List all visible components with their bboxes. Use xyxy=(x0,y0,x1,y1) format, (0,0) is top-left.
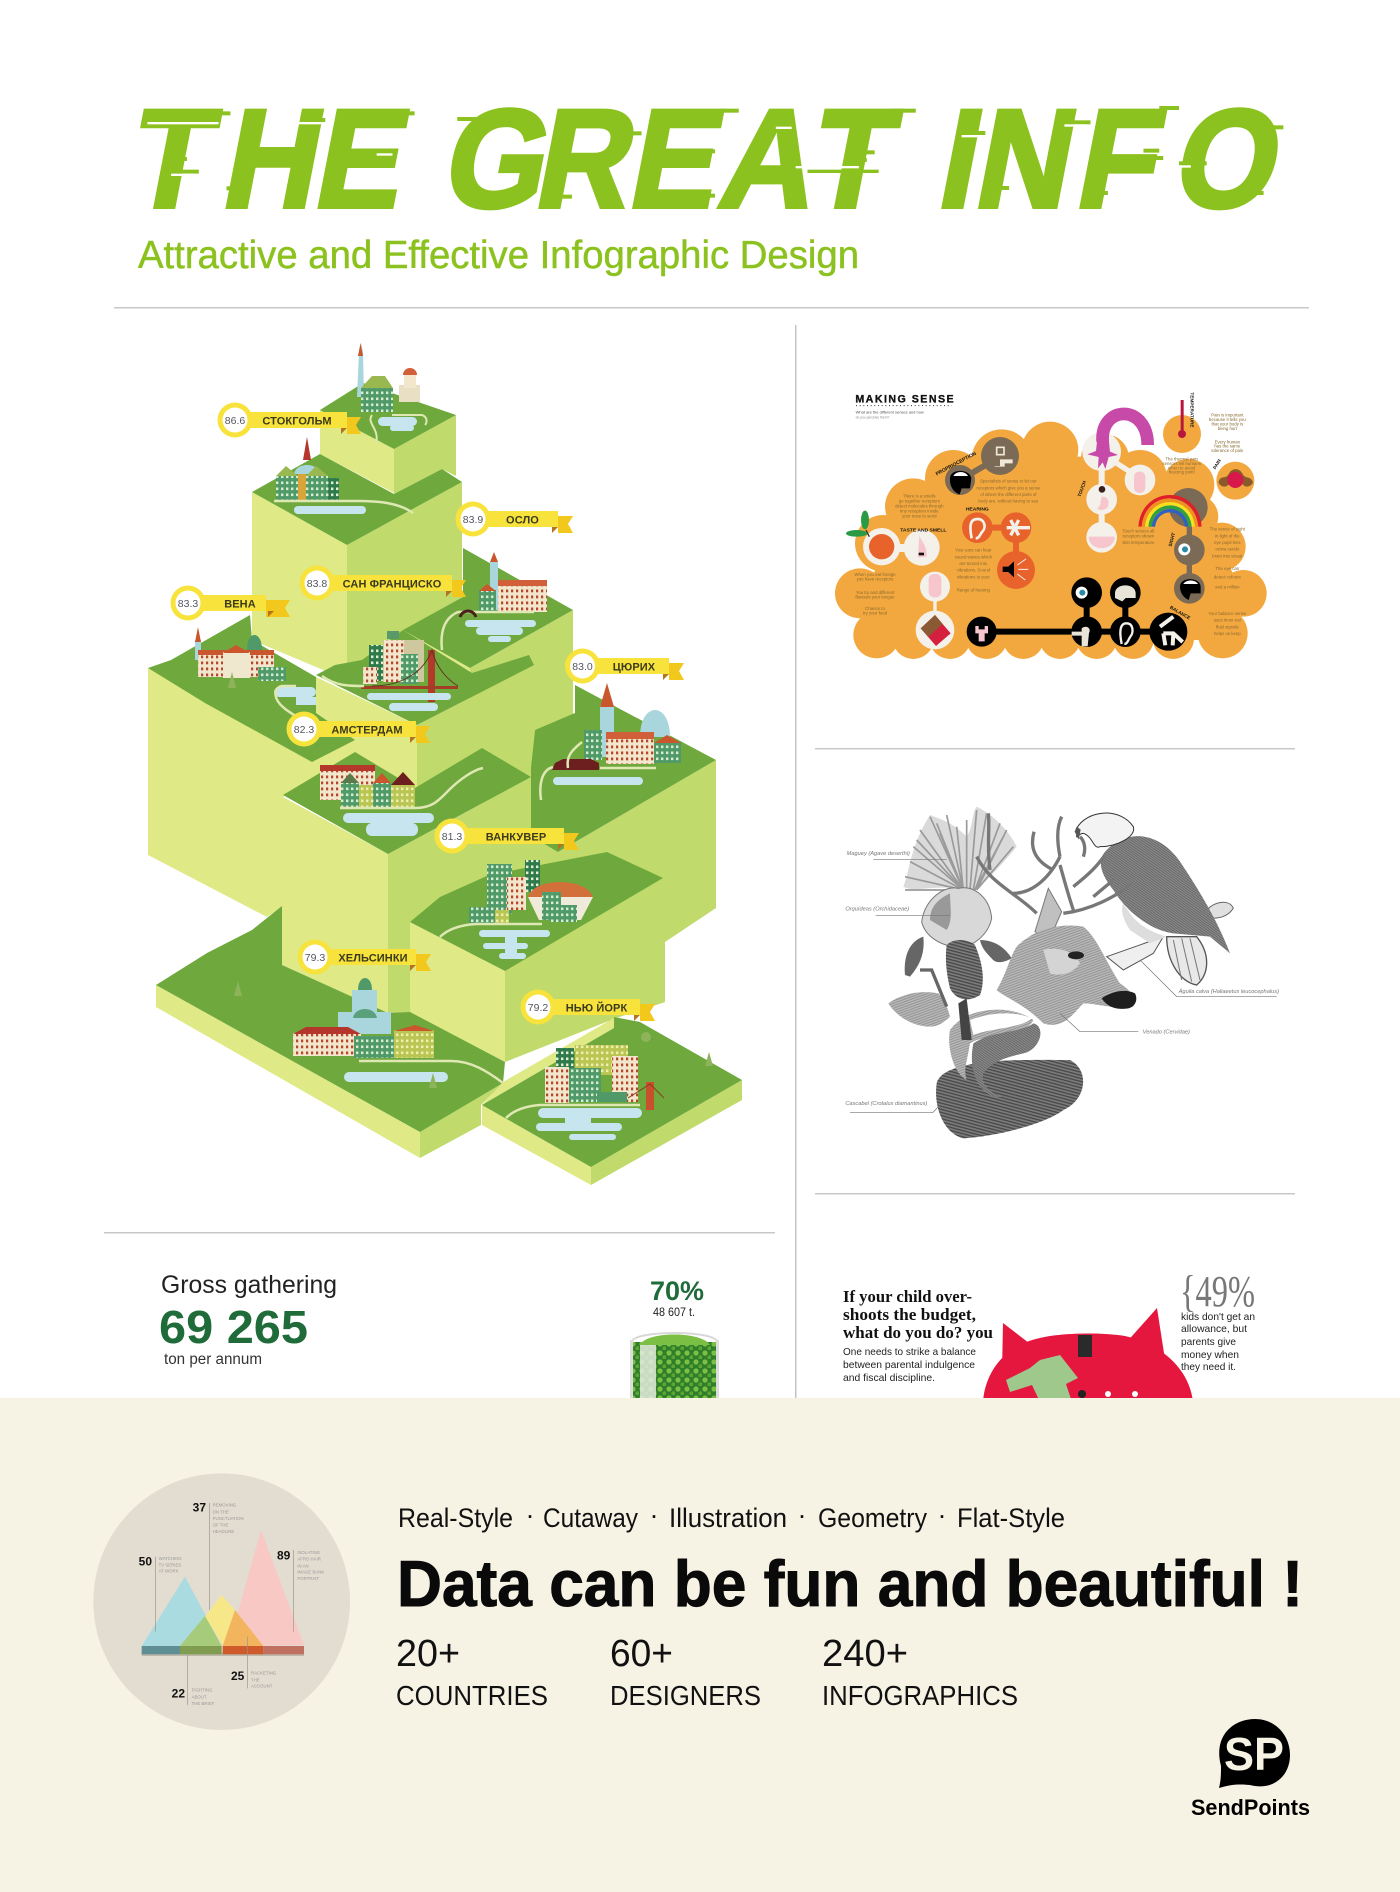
question body: and fiscal discipline. xyxy=(843,1372,935,1384)
sense group: taste and smell: TASTE AND SMELL xyxy=(900,528,946,534)
small caption texts: The eye can xyxy=(1215,566,1240,571)
illustration: antlers xyxy=(977,813,1132,913)
label: Vancouver 81.3: 81.3 xyxy=(442,831,462,843)
style categories: Geometry xyxy=(818,1503,927,1533)
circular mountain chart: FIGHTING xyxy=(192,1688,213,1693)
small caption texts: You try and different xyxy=(856,590,895,595)
style categories: Cutaway xyxy=(543,1503,638,1533)
label: Amsterdam 82.3: 82.3 xyxy=(294,724,314,736)
orange cloud xyxy=(835,422,1267,659)
leader lines xyxy=(850,860,1277,1113)
small caption texts: The sense of sight xyxy=(1210,527,1246,532)
small caption texts: detect molecules through xyxy=(895,503,944,508)
label: Stockholm 86.6 xyxy=(218,402,361,438)
species labels: Orquídeas (Orchidaceae) xyxy=(845,907,909,913)
circular mountain chart: THE BRIEF xyxy=(192,1701,215,1706)
statistic body: parents give xyxy=(1181,1336,1236,1348)
small caption texts: when to avoid xyxy=(1168,465,1196,470)
circular mountain chart: AT WORK xyxy=(159,1569,179,1574)
illustration: agave and orchid xyxy=(888,807,1017,1027)
question headline xyxy=(843,1287,993,1342)
style categories: Flat-Style xyxy=(957,1503,1065,1533)
style categories: · xyxy=(938,1500,946,1530)
illustration: rattlesnake xyxy=(936,998,1083,1138)
label: Amsterdam 82.3: АМСТЕРДАМ xyxy=(331,724,403,736)
small caption texts: body are, without having to see xyxy=(978,499,1039,504)
small caption texts: eye pupil lens xyxy=(1214,540,1241,545)
label: Vienna 83.3: ВЕНА xyxy=(224,598,256,610)
circular mountain chart: IN AN xyxy=(297,1563,309,1568)
stat: infographics xyxy=(822,1633,1018,1711)
label: Oslo 83.9: ОСЛО xyxy=(506,514,539,526)
small caption texts: being hurt xyxy=(1218,426,1238,431)
small caption texts: fluid signals xyxy=(1216,624,1239,629)
panel: deer, eagle and snake illustration xyxy=(845,807,1279,1138)
logo: SendPoints: SendPoints xyxy=(1191,1795,1310,1820)
circular mountain chart xyxy=(93,1473,350,1730)
label: Zurich 83.0: ЦЮРИХ xyxy=(613,662,656,674)
circular mountain chart: AFRO HAIR xyxy=(297,1557,321,1562)
statistic body: kids don't get an xyxy=(1181,1311,1255,1323)
stat: designers xyxy=(610,1633,761,1711)
panel: cream footer xyxy=(0,1398,1400,1892)
small caption texts: vibrations to your xyxy=(957,574,990,579)
sense group: temperature and pain: TEMPERATURE xyxy=(1190,392,1195,428)
circular mountain chart: 25 xyxy=(231,1669,245,1683)
small caption texts: retina sends xyxy=(1216,547,1239,552)
block: church tile xyxy=(252,437,462,680)
block: Helsinki xyxy=(156,906,505,1158)
small caption texts: go together receptors xyxy=(899,498,940,503)
title: INFO xyxy=(929,80,1295,237)
sense group: touch xyxy=(1077,414,1155,553)
small caption texts: When you eat foreign xyxy=(854,572,896,577)
heading: making sense xyxy=(855,393,955,419)
block: New York xyxy=(482,1017,742,1185)
question body xyxy=(843,1346,976,1384)
block: Oslo xyxy=(403,548,573,800)
label: Stockholm 86.6: 86.6 xyxy=(225,415,245,427)
label: New York 79.2 xyxy=(520,990,655,1024)
panel: making sense xyxy=(835,392,1267,659)
label: Vancouver 81.3 xyxy=(434,818,579,854)
small caption texts: receptors which give you a sense xyxy=(976,485,1041,490)
sense group: proprioception xyxy=(935,437,1019,495)
stat: countries: COUNTRIES xyxy=(396,1680,548,1711)
small caption texts: tolerance of pain xyxy=(1211,448,1244,453)
title: THE xyxy=(119,80,422,237)
small caption texts: in light of the xyxy=(1215,533,1240,538)
percentage: 70% xyxy=(650,1276,704,1306)
gathering unit: ton per annum xyxy=(164,1351,262,1368)
style categories xyxy=(398,1500,1065,1533)
panel: gross gathering xyxy=(159,1271,719,1402)
label: Oslo 83.9 xyxy=(456,502,573,536)
label: Helsinki 79.3 xyxy=(298,940,431,974)
block: Vancouver xyxy=(410,852,665,1062)
small caption texts: Chance to xyxy=(865,606,885,611)
species labels: Venado (Cervidae) xyxy=(1143,1030,1190,1036)
circular mountain chart: REMOVING xyxy=(213,1503,237,1508)
sense group: temperature and pain xyxy=(1163,392,1254,500)
stat: countries: 20+ xyxy=(396,1633,460,1675)
label: Zurich 83.0: 83.0 xyxy=(572,661,593,673)
block: Amsterdam xyxy=(283,748,531,1013)
small caption texts: Your ears can hear xyxy=(955,548,992,553)
label: New York 79.2: 79.2 xyxy=(528,1002,548,1014)
sense group: proprioception: PROPRIOCEPTION xyxy=(935,451,978,477)
gathering heading: Gross gathering xyxy=(161,1271,337,1299)
logo: SendPoints xyxy=(1191,1719,1310,1820)
label: Vienna 83.3 xyxy=(170,586,290,620)
circular mountain chart: PUNCTUATION xyxy=(213,1516,244,1521)
circular mountain chart: OF THE xyxy=(213,1523,229,1528)
circular mountain chart: WATCHING xyxy=(159,1556,182,1561)
stat: countries xyxy=(396,1633,548,1711)
small caption texts: uses inner ear xyxy=(1214,618,1242,623)
label: Vancouver 81.3: ВАНКУВЕР xyxy=(486,832,546,844)
small caption texts: Range of hearing xyxy=(957,588,991,593)
sense group: hearing xyxy=(962,507,1035,589)
label: San Francisco 83.8 xyxy=(300,566,466,600)
small caption texts: There is a smells xyxy=(903,493,936,498)
title: GREAT xyxy=(434,80,909,237)
question body: between parental indulgence xyxy=(843,1359,975,1371)
label: Stockholm 86.6: СТОКГОЛЬМ xyxy=(262,416,332,428)
species labels: Águila calva (Haliaeetus leucocephalus) xyxy=(1178,988,1279,995)
style categories: · xyxy=(798,1500,806,1530)
question headline: what do you do? you xyxy=(843,1323,993,1342)
red devil piggy bank xyxy=(983,1308,1193,1402)
species labels xyxy=(845,851,1279,1107)
small caption texts: flavours your tongue xyxy=(855,595,895,600)
small caption texts: Touch senses all xyxy=(1122,529,1154,534)
small caption texts: Pain is important xyxy=(1211,413,1244,418)
circular mountain chart: ABOUT xyxy=(192,1694,207,1699)
title xyxy=(119,80,1295,237)
sense group: balance xyxy=(967,577,1191,651)
statistic 49%: {49% xyxy=(1180,1267,1255,1316)
small caption texts: brain into visual xyxy=(1212,553,1242,558)
circular mountain chart: PORTRAIT xyxy=(297,1576,319,1581)
label: San Francisco 83.8: САН ФРАНЦИСКО xyxy=(343,578,442,590)
question headline: shoots the budget, xyxy=(843,1305,976,1324)
small caption texts: vibrations. Sound xyxy=(957,568,991,573)
heading: making sense: MAKING SENSE xyxy=(855,393,955,405)
small caption texts: that your body is xyxy=(1211,421,1243,426)
circular mountain chart: ISOLATING xyxy=(297,1550,321,1555)
style categories: · xyxy=(650,1500,658,1530)
headline: Data can be fun and beautiful ! xyxy=(397,1547,1303,1620)
small caption texts: receptors shown xyxy=(1122,534,1155,539)
small caption texts: sound waves which xyxy=(955,554,993,559)
small caption texts: Your balance sense xyxy=(1208,611,1247,616)
circular mountain chart: THE xyxy=(251,1677,260,1682)
circular mountain chart: HEADLINE xyxy=(213,1529,234,1534)
stat: infographics: 240+ xyxy=(822,1633,908,1675)
small caption texts: of where the different parts of xyxy=(980,492,1037,497)
circular mountain chart: 37 xyxy=(193,1500,206,1514)
circular mountain chart: 22 xyxy=(172,1686,185,1700)
gathering value: 69 265 xyxy=(159,1301,308,1353)
label: Oslo 83.9: 83.9 xyxy=(463,514,483,526)
circular mountain chart: RACKETING xyxy=(251,1671,277,1676)
species labels: Cascabel (Crotalus diamantinus) xyxy=(845,1101,928,1107)
statistic body: they need it. xyxy=(1181,1361,1236,1373)
statistic body xyxy=(1181,1311,1255,1373)
circular mountain chart: IMAGE BANK xyxy=(297,1570,324,1575)
label: Helsinki 79.3: ХЕЛЬСИНКИ xyxy=(338,952,408,964)
glass of herbs xyxy=(630,1333,719,1402)
small caption texts: helps us keep xyxy=(1214,631,1241,636)
heading: making sense: do you perceive them? xyxy=(856,415,889,419)
heading: making sense: What are the different senses and how xyxy=(856,410,924,415)
stat: infographics: INFOGRAPHICS xyxy=(822,1680,1018,1711)
label: New York 79.2: НЬЮ ЙОРК xyxy=(566,1002,627,1014)
circular mountain chart: ACCOUNT xyxy=(251,1684,273,1689)
tonnage: 48 607 t. xyxy=(653,1307,695,1319)
small caption texts: Specialists of sense to let our xyxy=(980,479,1037,484)
sense group: sight xyxy=(1140,488,1208,604)
label: Zurich 83.0 xyxy=(565,648,684,684)
small caption texts: sensors tell humans xyxy=(1162,461,1201,466)
question body: One needs to strike a balance xyxy=(843,1346,976,1358)
sense group: touch: TOUCH xyxy=(1077,480,1087,497)
illustration: eagle xyxy=(1075,813,1233,985)
small caption texts: detect colours xyxy=(1214,575,1241,580)
small caption texts: try your food xyxy=(863,611,888,616)
block: Stockholm xyxy=(320,343,456,494)
stat: designers: 60+ xyxy=(610,1633,673,1675)
species labels: Maguey (Agave deserthi) xyxy=(847,851,910,857)
small caption texts: freezing point xyxy=(1169,470,1195,475)
small caption texts: tiny receptors inside xyxy=(900,508,939,513)
style categories: · xyxy=(526,1500,534,1530)
sense group: temperature and pain: PAIN xyxy=(1212,458,1222,470)
question headline: If your child over- xyxy=(843,1287,972,1306)
sense group: taste and smell xyxy=(846,511,954,649)
style categories: Illustration xyxy=(669,1503,787,1533)
circular mountain chart: 50 xyxy=(139,1554,152,1568)
label: Vienna 83.3: 83.3 xyxy=(178,598,198,610)
small caption texts: has the same xyxy=(1214,444,1241,449)
label: Amsterdam 82.3 xyxy=(286,712,430,746)
small caption texts: your nose to send xyxy=(902,513,937,518)
sense group: hearing: HEARING xyxy=(966,507,989,513)
circular mountain chart: TV SERIES xyxy=(159,1563,181,1568)
circular mountain chart: 89 xyxy=(277,1548,291,1562)
illustration: deer head xyxy=(997,888,1136,1025)
sense group: balance: BALANCE xyxy=(1169,605,1191,621)
label: San Francisco 83.8: 83.8 xyxy=(307,578,327,590)
panel: child budget xyxy=(843,1267,1255,1402)
small caption texts: you have receptors xyxy=(857,577,893,582)
small caption texts xyxy=(854,413,1247,636)
subtitle: Attractive and Effective Infographic Design xyxy=(138,234,859,277)
panel: isometric city map xyxy=(148,343,742,1185)
small caption texts: are turned into xyxy=(959,561,988,566)
statistic body: money when xyxy=(1181,1349,1239,1361)
small caption texts: because it tells you xyxy=(1209,417,1246,422)
sense group: sight: SIGHT xyxy=(1168,532,1176,547)
statistic body: allowance, but xyxy=(1181,1323,1247,1335)
block: Vienna and Amsterdam face xyxy=(148,615,388,1013)
small caption texts: Every human xyxy=(1215,439,1241,444)
style categories: Real-Style xyxy=(398,1503,513,1533)
circular mountain chart: ON THE xyxy=(213,1509,229,1514)
block: Zurich xyxy=(484,683,716,1062)
logo: SendPoints: SP xyxy=(1224,1728,1284,1780)
small caption texts: and a million xyxy=(1215,584,1240,589)
stat: designers: DESIGNERS xyxy=(610,1680,761,1711)
small caption texts: The thermal pain xyxy=(1165,457,1198,462)
block: San Francisco xyxy=(316,630,535,795)
small caption texts: skin temperature xyxy=(1122,540,1155,545)
label: Helsinki 79.3: 79.3 xyxy=(305,952,325,964)
